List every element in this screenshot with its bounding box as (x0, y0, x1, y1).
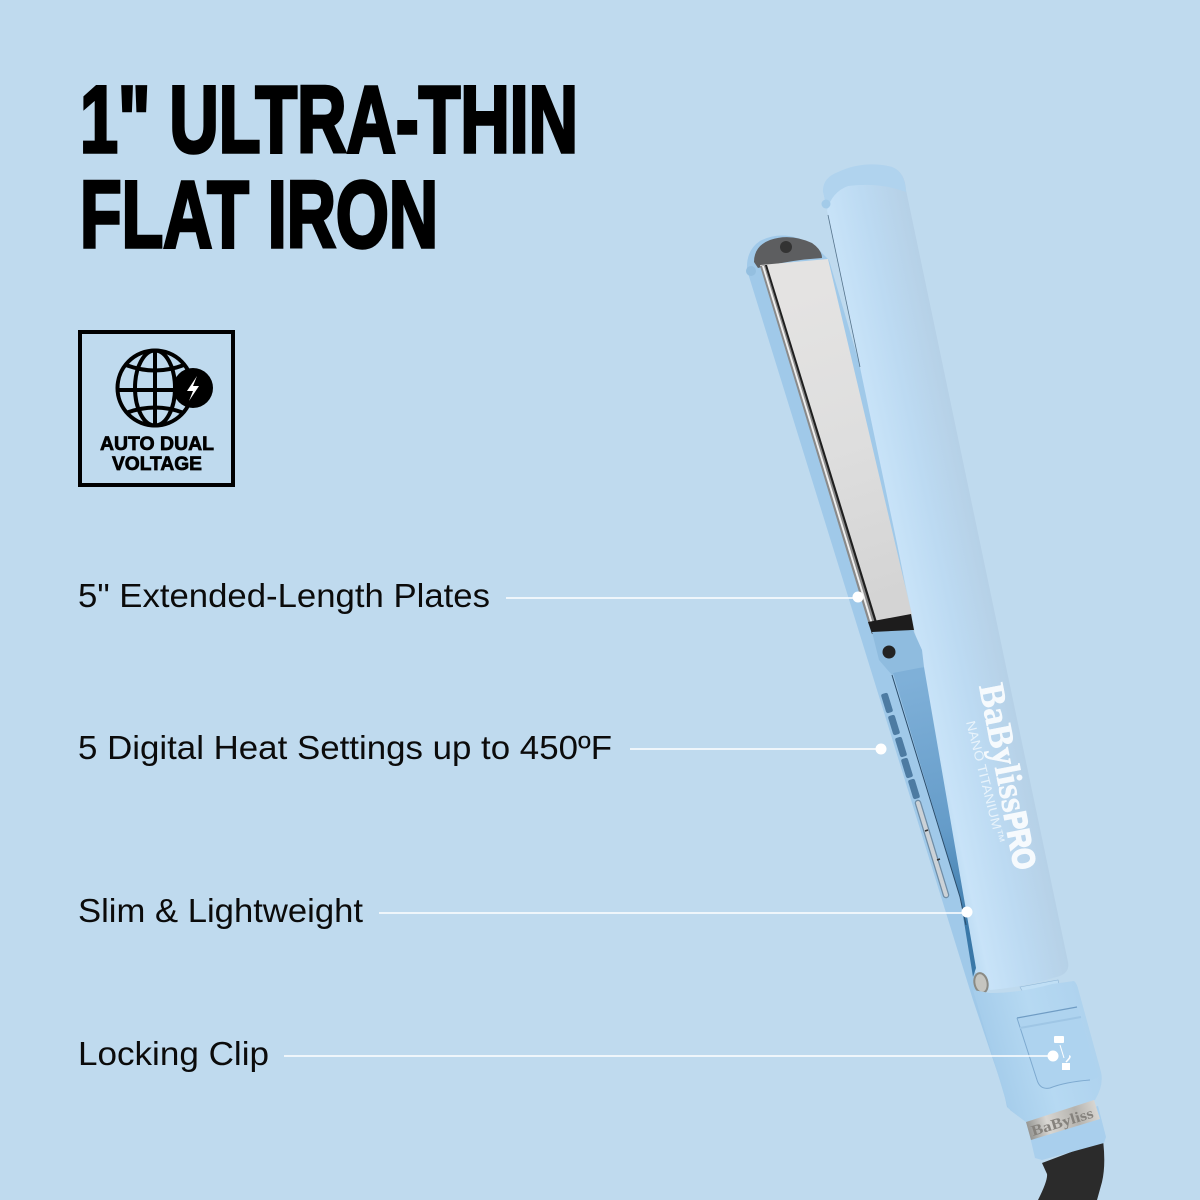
callout: digital heat settings: 5 Digital Heat Settings up to 450ºF (78, 729, 612, 766)
back arm (823, 164, 1068, 990)
hinge connector (1020, 980, 1060, 994)
badge: auto dual voltage (80, 332, 233, 485)
callout: locking clip (78, 1035, 1058, 1072)
locking clip (1017, 1007, 1098, 1088)
power and temperature rocker (918, 803, 946, 895)
title: 1" ULTRA-THIN (80, 67, 578, 173)
handle (973, 981, 1102, 1122)
tip screw (780, 241, 792, 253)
lower collar (1028, 1106, 1106, 1160)
metal band: BaByliss (1029, 1106, 1096, 1140)
title: FLAT IRON (80, 162, 438, 268)
metal band (1026, 1100, 1100, 1140)
lock icons (1054, 1036, 1070, 1070)
hinge pin (973, 972, 989, 994)
power cord (1038, 1140, 1104, 1200)
rim shadow (828, 215, 860, 367)
plate black base (868, 614, 914, 634)
plate metal edge (760, 265, 876, 625)
callout: slim and lightweight (78, 892, 972, 929)
badge label: AUTO DUAL (100, 434, 214, 455)
brand logo: PRO (997, 809, 1043, 872)
icon: globe with lightning bolt (118, 350, 213, 426)
mount panel (872, 630, 924, 675)
peg: back arm (822, 200, 830, 208)
callout: extended-length plates: 5" Extended-Length Plates (78, 577, 490, 614)
heat setting buttons (881, 692, 920, 800)
back arm cap facet (823, 164, 906, 210)
brand logo: BaByliss (971, 680, 1035, 815)
control panel (893, 667, 976, 977)
brand logo (963, 680, 1043, 872)
brand logo: NANO TITANIUM™ (963, 719, 1008, 845)
tip cap (754, 237, 822, 268)
badge: auto dual voltage: VOLTAGE (112, 454, 202, 475)
front arm (747, 236, 1030, 1125)
mount screw (882, 646, 896, 658)
title (80, 67, 578, 268)
callout: extended-length plates (78, 577, 864, 614)
callout: locking clip: Locking Clip (78, 1035, 269, 1072)
product: flat iron (746, 164, 1106, 1200)
callout: digital heat settings (78, 729, 886, 766)
heating plate (760, 259, 912, 622)
callout: slim and lightweight: Slim & Lightweight (78, 892, 363, 929)
peg: front arm (746, 266, 756, 276)
